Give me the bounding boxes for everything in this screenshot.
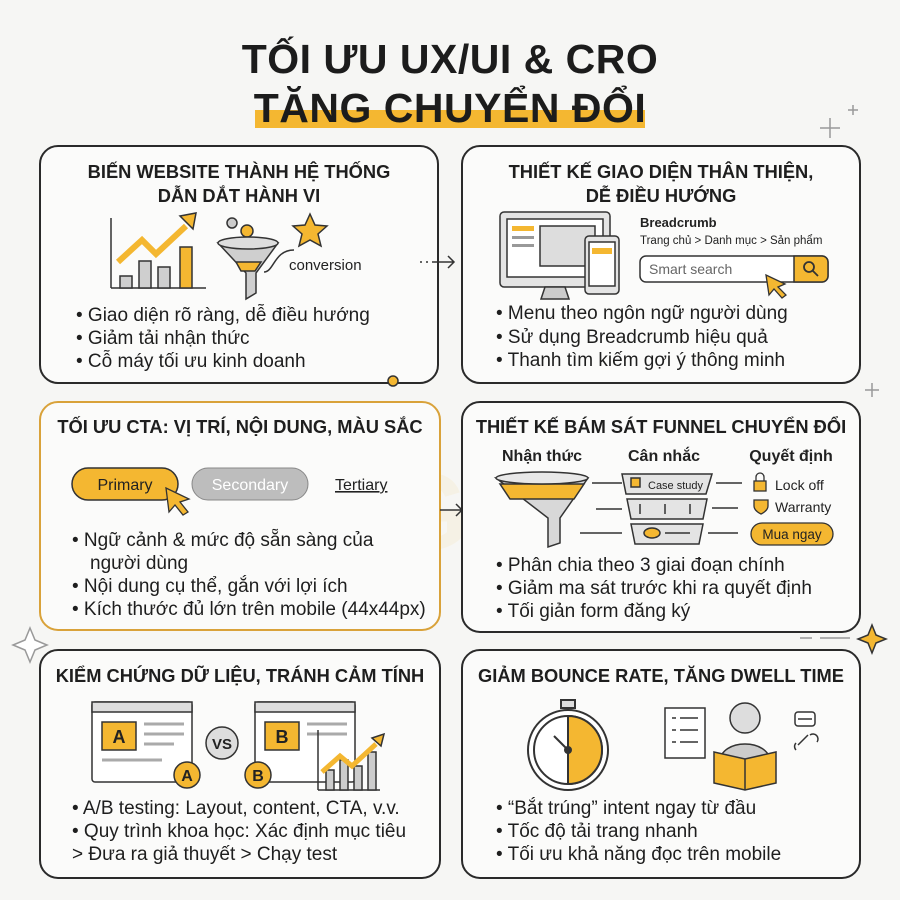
heading xyxy=(509,161,813,206)
bullets: • Phân chia theo 3 giai đoạn chính xyxy=(496,555,785,576)
decision items xyxy=(751,473,833,545)
icon: devices xyxy=(500,212,619,299)
decision items: Mua ngay xyxy=(762,527,822,542)
bullets xyxy=(496,303,788,371)
bullets xyxy=(76,304,370,372)
panel: bounce rate xyxy=(462,650,860,878)
bullets: • Sử dụng Breadcrumb hiệu quả xyxy=(496,327,768,348)
bullets xyxy=(72,530,426,620)
heading: DỄ ĐIỀU HƯỚNG xyxy=(586,185,736,206)
decorative sparkles xyxy=(13,105,886,662)
bullets xyxy=(72,798,406,865)
icon: A/B test xyxy=(92,702,384,790)
bullets: • Giao diện rõ ràng, dễ điều hướng xyxy=(76,304,370,326)
icon: A/B test: A xyxy=(181,768,193,785)
buttons: Primary xyxy=(97,477,153,494)
icon: funnel xyxy=(496,472,622,547)
decorative lines xyxy=(800,637,850,639)
panel: friendly UI xyxy=(462,146,860,383)
consideration boxes: Case study xyxy=(648,480,704,492)
bullets: • Nội dung cụ thể, gắn với lợi ích xyxy=(72,575,348,597)
heading: DẪN DẮT HÀNH VI xyxy=(158,185,320,206)
icon: funnel to conversion xyxy=(218,214,362,299)
breadcrumb & search: Trang chủ > Danh mục > Sản phẩm xyxy=(640,235,822,247)
bullets: • Tốc độ tải trang nhanh xyxy=(496,821,698,842)
stage labels xyxy=(502,446,833,465)
breadcrumb & search: Breadcrumb xyxy=(640,215,717,230)
bullets xyxy=(496,555,812,622)
panel: funnel xyxy=(462,402,860,632)
panel: CTA xyxy=(40,402,440,630)
icon: A/B test: B xyxy=(252,768,264,785)
bullets: • Ngữ cảnh & mức độ sẵn sàng của xyxy=(72,530,374,551)
bullets: • Giảm ma sát trước khi ra quyết định xyxy=(496,578,812,599)
icon: reader xyxy=(665,703,818,790)
title: TĂNG CHUYỂN ĐỔI xyxy=(254,84,646,131)
stage labels: Nhận thức xyxy=(502,448,582,465)
heading: BIẾN WEBSITE THÀNH HỆ THỐNG xyxy=(88,161,390,182)
bullets xyxy=(496,797,781,865)
heading: GIẢM BOUNCE RATE, TĂNG DWELL TIME xyxy=(478,665,844,686)
bullets: • Cỗ máy tối ưu kinh doanh xyxy=(76,350,306,372)
icon: A/B test: A xyxy=(112,727,126,747)
bullets: người dùng xyxy=(90,553,188,574)
panel: data validation xyxy=(40,650,440,878)
decision items: Lock off xyxy=(775,477,824,493)
icon: funnel to conversion: conversion xyxy=(289,257,362,274)
icon: growth chart xyxy=(111,213,206,288)
title xyxy=(242,36,658,131)
bullets: • Menu theo ngôn ngữ người dùng xyxy=(496,303,788,324)
bullets: > Đưa ra giả thuyết > Chạy test xyxy=(72,844,338,865)
bullets: • Tối giản form đăng ký xyxy=(496,601,691,622)
heading: KIỂM CHỨNG DỮ LIỆU, TRÁNH CẢM TÍNH xyxy=(56,665,424,686)
bullets: • Giảm tải nhận thức xyxy=(76,328,250,349)
breadcrumb & search xyxy=(640,215,828,298)
heading xyxy=(88,161,390,206)
icon: A/B test: VS xyxy=(212,736,232,753)
buttons: Secondary xyxy=(212,477,288,494)
heading: THIẾT KẾ GIAO DIỆN THÂN THIỆN, xyxy=(509,161,813,182)
watermark: LIGHT xyxy=(285,451,615,574)
buttons xyxy=(72,468,387,515)
arrow xyxy=(440,504,462,516)
icon: A/B test: B xyxy=(276,727,288,747)
consideration boxes xyxy=(622,474,742,544)
bullets: • Quy trình khoa học: Xác định mục tiêu xyxy=(72,821,406,842)
buttons: Tertiary xyxy=(335,477,387,494)
stage labels: Cân nhắc xyxy=(628,446,700,465)
heading: THIẾT KẾ BÁM SÁT FUNNEL CHUYỂN ĐỔI xyxy=(476,416,846,437)
title: TỐI ƯU UX/UI & CRO xyxy=(242,36,658,82)
bullets: • “Bắt trúng” intent ngay từ đầu xyxy=(496,797,756,819)
bullets: • Thanh tìm kiếm gợi ý thông minh xyxy=(496,350,785,371)
bullets: • A/B testing: Layout, content, CTA, v.v. xyxy=(72,798,400,819)
stage labels: Quyết định xyxy=(749,448,833,465)
decision items: Warranty xyxy=(775,499,831,515)
bullets: • Tối ưu khả năng đọc trên mobile xyxy=(496,844,781,865)
icon: stopwatch xyxy=(528,700,608,790)
panel: behavior system xyxy=(40,146,438,386)
heading: TỐI ƯU CTA: VỊ TRÍ, NỘI DUNG, MÀU SẮC xyxy=(57,416,423,437)
arrow xyxy=(420,256,454,268)
breadcrumb & search: Smart search xyxy=(649,261,732,277)
bullets: • Kích thước đủ lớn trên mobile (44x44px) xyxy=(72,599,426,620)
